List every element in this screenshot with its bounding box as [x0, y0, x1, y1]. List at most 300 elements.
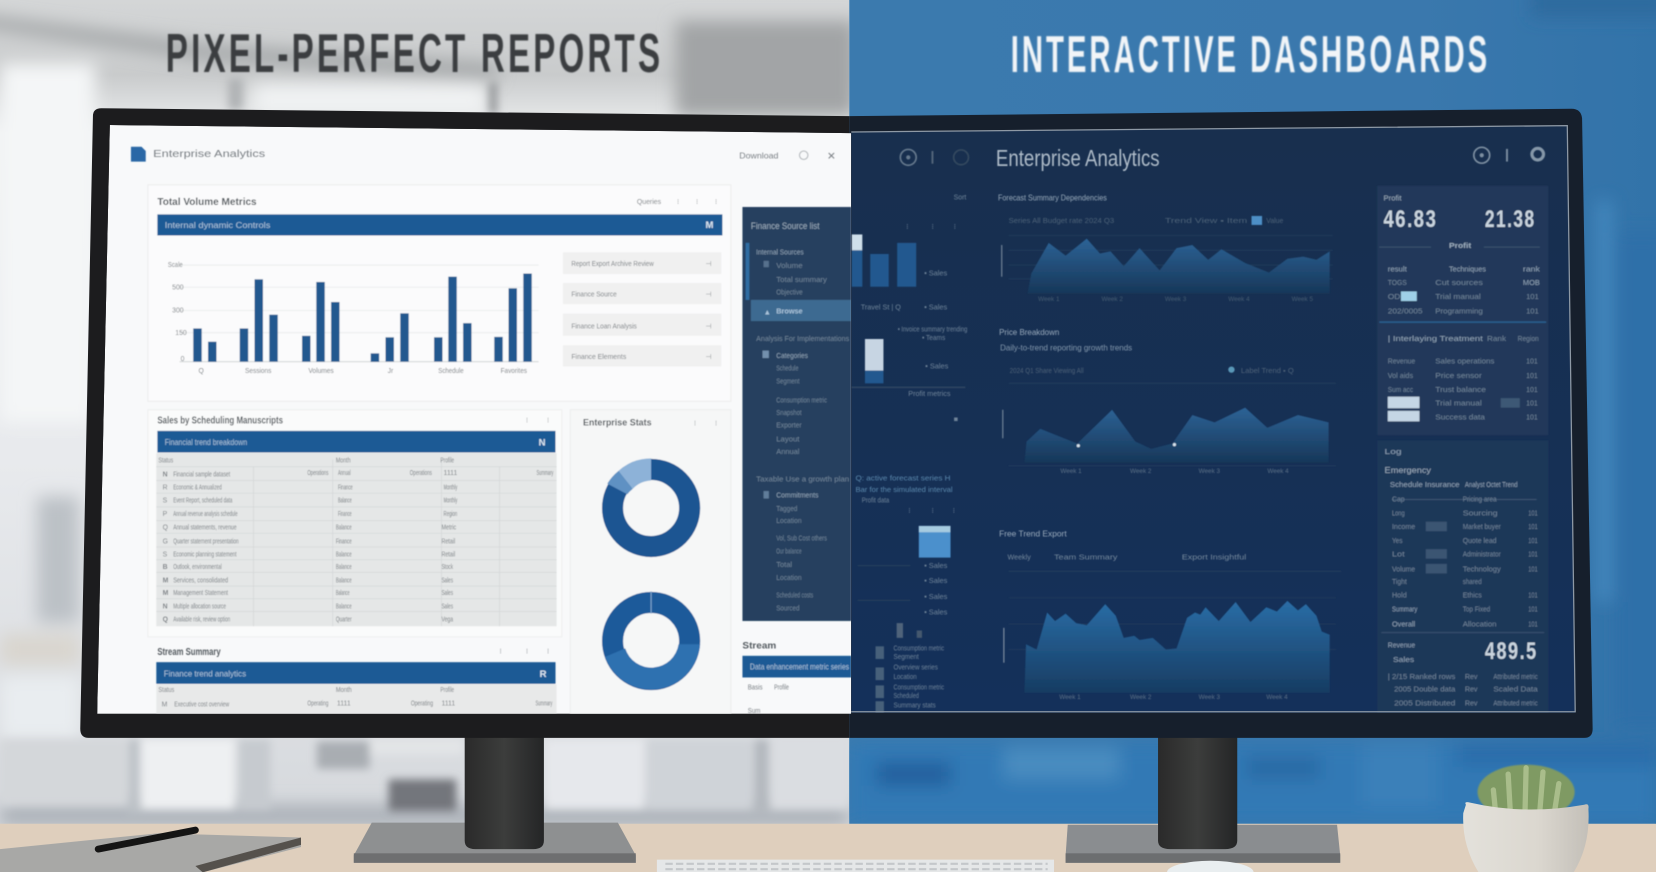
- side list: ⊣: [705, 323, 711, 330]
- panel: emergency table sidebar: Sourcing: [1463, 508, 1498, 517]
- panel: emergency table sidebar: Ethics: [1463, 591, 1482, 600]
- left screen: white report: [97, 125, 851, 715]
- donut chart: upper: [607, 458, 690, 547]
- panel: emergency table sidebar: 101: [1528, 536, 1538, 545]
- monitor bezel: [80, 108, 1593, 738]
- data table: Operations: [410, 470, 432, 477]
- panel: donut chart card: [570, 410, 731, 714]
- panel: profit KPI sidebar: MOB: [1523, 278, 1540, 287]
- monitor stand: right: [1066, 737, 1340, 863]
- panel: navigation sidebar: Location: [776, 516, 802, 525]
- panel: emergency table sidebar: Sales: [1393, 655, 1415, 664]
- data table: 1111: [444, 470, 457, 477]
- panel: navigation sidebar: Taxable Use a growth plan: [756, 475, 849, 484]
- area chart: free trend export: Export Insightful: [1182, 553, 1247, 562]
- panel: profit KPI sidebar: Trust balance: [1435, 385, 1486, 394]
- panel: profit KPI sidebar: | Interlaying Treatment: [1388, 334, 1483, 343]
- panel: total volume metrics card: ⁝: [677, 199, 679, 206]
- desk item: mouse: [1167, 861, 1254, 872]
- data table: Event Report, scheduled data: [173, 498, 232, 505]
- panel: emergency table sidebar: Administrator: [1463, 550, 1501, 559]
- data table: Services, consolidated: [173, 577, 228, 584]
- panel: emergency table sidebar: Emergency: [1385, 465, 1432, 475]
- panel: profit KPI sidebar: Rank: [1487, 334, 1506, 343]
- panel: emergency table sidebar: Overall: [1392, 619, 1416, 628]
- panel: emergency table sidebar: Market buyer: [1463, 522, 1501, 531]
- left mini column: [851, 193, 967, 713]
- data table: Outlook, environmental: [173, 564, 222, 571]
- panel: emergency table sidebar: 2005 Distributed: [1394, 698, 1455, 707]
- panel: navigation sidebar: Schedule: [776, 364, 798, 373]
- panel: emergency table sidebar: Analyst Octet Trend: [1465, 480, 1518, 489]
- panel: emergency table sidebar: Volume: [1392, 564, 1415, 573]
- panel: navigation sidebar: Total summary: [776, 275, 827, 284]
- panel: profit KPI sidebar: Trial manual: [1435, 399, 1482, 408]
- data table: Balance: [336, 552, 352, 559]
- report header: [131, 147, 836, 162]
- data table: Finance: [338, 511, 352, 518]
- data table: Economic & Annualized: [173, 484, 222, 491]
- data table: N: [163, 471, 168, 478]
- panel: emergency table sidebar: shared: [1463, 577, 1482, 586]
- donut chart: lower: [605, 591, 700, 689]
- left mini column: ⁝: [908, 506, 911, 515]
- panel: navigation sidebar: Scheduled costs: [776, 591, 813, 600]
- bar chart: Favorites: [501, 368, 528, 375]
- data table: Sales: [441, 577, 453, 584]
- panel: stream summary table: Operating: [411, 700, 433, 707]
- data table: S: [163, 552, 168, 559]
- panel: total volume metrics card: [148, 185, 731, 401]
- data table: Financial sample dataset: [173, 471, 230, 478]
- area chart: price breakdown: Week 1: [1060, 468, 1082, 475]
- data table: Month: [336, 458, 351, 465]
- side list: [563, 252, 721, 366]
- panel: profit KPI sidebar: 101: [1526, 385, 1538, 394]
- dashboard header: [900, 145, 1544, 171]
- panel: profit KPI sidebar: Techniques: [1449, 264, 1486, 273]
- panel: donut chart card: ⁝: [715, 421, 717, 428]
- panel: emergency table sidebar: Schedule Insurance: [1390, 480, 1460, 489]
- area chart: free trend export: Weekly: [1008, 553, 1031, 562]
- panel: emergency table sidebar: 101: [1528, 564, 1538, 573]
- data table: Annual: [338, 470, 351, 477]
- panel: stream summary table: Profile: [440, 687, 454, 694]
- panel: navigation sidebar: Layout: [776, 434, 799, 443]
- panel: emergency table sidebar: Tight: [1392, 577, 1407, 586]
- data table: Region: [444, 511, 457, 518]
- left mini column: ▪ Sales: [924, 561, 948, 570]
- left mini column: Overview series: [893, 663, 938, 672]
- left mini column: Scheduled: [893, 691, 919, 700]
- data table: Balance: [336, 590, 350, 597]
- panel: emergency table sidebar: Yes: [1392, 536, 1403, 545]
- data table: B: [163, 564, 168, 571]
- area chart: forecast summary: Week 4: [1228, 296, 1250, 303]
- panel: profit KPI sidebar: 101: [1526, 412, 1538, 421]
- panel: profit KPI sidebar: 101: [1526, 371, 1538, 380]
- panel: profit KPI sidebar: Profit: [1449, 241, 1472, 250]
- panel: profit KPI sidebar: Region: [1518, 334, 1539, 343]
- panel: stream mini table: [742, 640, 851, 715]
- panel: stream summary table: Operating: [307, 700, 329, 707]
- panel: navigation sidebar: Sourced: [776, 603, 799, 612]
- area chart: price breakdown: Label Trend ▪ Q: [1241, 368, 1294, 375]
- data table: Profile: [440, 458, 454, 465]
- area chart: free trend export: Team Summary: [1054, 553, 1118, 562]
- data table: Quarter: [336, 616, 352, 623]
- panel: profit KPI sidebar: Sales operations: [1435, 356, 1495, 365]
- area chart: forecast summary: Week 2: [1102, 296, 1123, 303]
- panel: emergency table sidebar: Log: [1385, 447, 1401, 456]
- area chart: free trend export: [999, 528, 1341, 701]
- left heading: Pixel-Perfect Reports: PIXEL-PERFECT REPORTS: [166, 22, 663, 84]
- left mini column: ▪ Sales: [925, 362, 949, 371]
- panel: stream summary table: ⁝: [500, 649, 502, 656]
- panel: navigation sidebar: Commitments: [776, 490, 819, 499]
- left mini column: ▪ Sales: [924, 302, 948, 311]
- data table: G: [163, 538, 168, 545]
- panel: emergency table sidebar: Technology: [1463, 564, 1501, 573]
- panel: profit KPI sidebar: 101: [1526, 399, 1538, 408]
- data table: Balance: [336, 564, 352, 571]
- panel: stream summary table: ⁝: [526, 649, 528, 656]
- data table: P: [163, 511, 168, 518]
- left mini column: ■: [954, 414, 959, 423]
- panel: right blue background: [849, 0, 1656, 834]
- panel: emergency table sidebar: 2005 Double data: [1394, 685, 1456, 694]
- left mini column: Q: active forecast series H: [855, 474, 951, 483]
- data table: Finance: [336, 538, 352, 545]
- bar chart: Volumes: [308, 368, 334, 375]
- data table: Balance: [336, 603, 352, 610]
- panel: stream summary table: Summary: [535, 700, 553, 707]
- panel: total volume metrics card: Internal dynamic Controls: [165, 220, 270, 230]
- left mini column: ▪ Sales: [924, 269, 948, 278]
- panel: profit KPI sidebar: Cut sources: [1435, 278, 1483, 287]
- data table: Operations: [307, 470, 329, 477]
- data table: Metric: [441, 525, 457, 532]
- data table: Finance: [338, 484, 353, 491]
- left mini column: Summary stats: [893, 701, 936, 710]
- panel: profit KPI sidebar: 101: [1526, 292, 1539, 301]
- data table: Management Statement: [173, 590, 228, 597]
- bar chart: 300: [172, 308, 184, 315]
- panel: emergency table sidebar: 101: [1528, 550, 1538, 559]
- panel: emergency table sidebar: [1377, 440, 1548, 714]
- panel: emergency table sidebar: Rev: [1465, 672, 1478, 681]
- data table: Stock: [441, 564, 453, 571]
- left mini column: Sort: [954, 193, 966, 202]
- panel: emergency table sidebar: Income: [1392, 522, 1415, 531]
- panel: navigation sidebar: Location: [776, 573, 802, 582]
- dashboard header: Enterprise Analytics: [996, 145, 1160, 171]
- data table: Annual statements, revenue: [173, 525, 237, 532]
- panel: stream mini table: Profile: [774, 685, 789, 692]
- area chart: price breakdown: Daily-to-trend reporting growth trends: [1000, 343, 1132, 353]
- side list: ⊣: [705, 292, 711, 299]
- panel: emergency table sidebar: Hold: [1392, 591, 1407, 600]
- panel: stream summary table: Status: [158, 687, 175, 694]
- left mini column: ⁝: [931, 506, 934, 515]
- data table: Balance: [336, 577, 352, 584]
- panel: navigation sidebar: Vol, Sub Cost others: [776, 534, 827, 543]
- panel: navigation sidebar: Exporter: [776, 421, 802, 430]
- KPI value: 46.83: 46.83: [1384, 206, 1437, 233]
- side list: Finance Loan Analysis: [571, 323, 637, 330]
- panel: navigation sidebar: Browse: [776, 307, 803, 316]
- KPI value: 21.38: 21.38: [1485, 206, 1536, 233]
- panel: profit KPI sidebar: 101: [1526, 356, 1538, 365]
- bar chart: 150: [175, 330, 187, 337]
- panel: stream summary table: R: [540, 669, 547, 680]
- panel: emergency table sidebar: Top Fixed: [1463, 604, 1490, 613]
- right screen: dark dashboard: [851, 125, 1580, 716]
- bar chart: Sessions: [245, 368, 272, 375]
- panel: emergency table sidebar: 101: [1528, 508, 1538, 517]
- left mini column: Segment: [893, 652, 919, 661]
- area chart: price breakdown: Week 4: [1267, 468, 1289, 475]
- panel: profit KPI sidebar: Profit: [1384, 194, 1401, 203]
- panel: sales table card: ⁝: [547, 417, 549, 424]
- panel: navigation sidebar: Consumption metric: [776, 395, 827, 404]
- left mini column: ▪ Teams: [922, 333, 946, 342]
- panel: navigation sidebar: Tagged: [776, 504, 797, 513]
- data table: Sales: [441, 590, 453, 597]
- area chart: price breakdown: [999, 327, 1336, 475]
- panel: emergency table sidebar: 101: [1528, 604, 1538, 613]
- KPI value: 489.5: 489.5: [1485, 638, 1538, 665]
- panel: profit KPI sidebar: Success data: [1435, 412, 1486, 421]
- left mini column: ▪ Sales: [924, 608, 948, 617]
- panel: profit KPI sidebar: Price sensor: [1435, 371, 1482, 380]
- left mini column: ⁝: [906, 222, 909, 231]
- area chart: forecast summary: Forecast Summary Dependencies: [998, 193, 1107, 203]
- bar chart: 500: [172, 284, 184, 291]
- area chart: free trend export: Week 1: [1059, 694, 1081, 701]
- panel: emergency table sidebar: Rev: [1465, 685, 1478, 694]
- data table: Retail: [441, 552, 456, 559]
- desk item: potted succulent: [1463, 765, 1589, 872]
- left mini column: Profit metrics: [908, 389, 951, 398]
- panel: navigation sidebar: Internal Sources: [756, 248, 804, 257]
- data table: S: [163, 498, 168, 505]
- panel: total volume metrics card: ⁝: [696, 199, 698, 206]
- left mini column: ▪ Sales: [924, 592, 948, 601]
- panel: sales table card: Sales by Scheduling Manuscripts: [157, 415, 283, 426]
- panel: total volume metrics card: M: [705, 220, 713, 231]
- left mini column: ▪ Invoice summary trending: [898, 325, 967, 334]
- panel: profit KPI sidebar: rank: [1523, 264, 1540, 273]
- panel: stream summary table: Month: [336, 687, 352, 694]
- panel: navigation sidebar: Volume: [776, 261, 803, 270]
- panel: donut chart card: ⁝: [694, 421, 696, 428]
- desk item: keyboard: [657, 860, 1054, 872]
- side list: ⊣: [705, 354, 711, 361]
- panel: total volume metrics card: ⁝: [715, 199, 717, 206]
- panel: sales table card: ⁝: [526, 417, 528, 424]
- panel: emergency table sidebar: 101: [1528, 591, 1538, 600]
- panel: emergency table sidebar: Attributed metric: [1493, 698, 1538, 707]
- area chart: price breakdown: 2024 Q1 Share Viewing All: [1010, 368, 1084, 375]
- panel: navigation sidebar: Our balance: [776, 546, 802, 555]
- data table: Q: [163, 616, 169, 623]
- panel: emergency table sidebar: Cap: [1392, 495, 1405, 504]
- report header: ✕: [827, 150, 836, 162]
- data table: Summary: [537, 470, 554, 477]
- panel: emergency table sidebar: Allocation: [1463, 619, 1497, 628]
- panel: navigation sidebar: Categories: [776, 351, 808, 360]
- data table: Balance: [338, 498, 352, 505]
- panel: total volume metrics card: Queries: [637, 199, 662, 206]
- panel: emergency table sidebar: Revenue: [1388, 640, 1415, 649]
- panel: profit KPI sidebar: Programming: [1435, 307, 1483, 316]
- side list: Finance Source: [571, 292, 617, 299]
- panel: emergency table sidebar: Long: [1392, 508, 1405, 517]
- data table: Multiple allocation source: [173, 603, 226, 610]
- area chart: free trend export: Week 4: [1266, 694, 1288, 701]
- area chart: forecast summary: Series All Budget rate 2024 Q3: [1009, 218, 1114, 225]
- panel: stream summary table: Finance trend analytics: [164, 668, 246, 678]
- panel: profit KPI sidebar: OD: [1388, 292, 1400, 301]
- panel: stream summary table: ⁝: [547, 649, 549, 656]
- panel: navigation sidebar: Annual: [776, 447, 800, 456]
- panel: emergency table sidebar: Attributed metric: [1493, 672, 1538, 681]
- panel: donut chart card: Enterprise Stats: [583, 418, 652, 428]
- panel: left office background: [0, 0, 855, 834]
- panel: navigation sidebar: Objective: [776, 288, 803, 297]
- left mini column: ▪ Sales: [924, 576, 948, 585]
- panel: emergency table sidebar: Summary: [1392, 604, 1418, 613]
- report header: Enterprise Analytics: [153, 148, 265, 160]
- panel: stream summary table: 1111: [441, 700, 455, 707]
- left mini column: Location: [893, 672, 917, 681]
- data table: Monthly: [444, 498, 458, 505]
- data table: Retail: [441, 538, 456, 545]
- desk item: notebook and pen: [0, 830, 301, 872]
- left mini column: Bar for the simulated interval: [855, 485, 953, 494]
- panel: navigation sidebar: Finance Source list: [751, 221, 820, 231]
- data table: N: [163, 603, 168, 610]
- area chart: free trend export: Free Trend Export: [999, 528, 1067, 538]
- panel: profit KPI sidebar: Vol aids: [1388, 371, 1413, 380]
- panel: emergency table sidebar: 101: [1528, 522, 1538, 531]
- data table: Available risk, review option: [173, 616, 230, 623]
- panel: navigation sidebar: ▲: [764, 308, 771, 317]
- panel: stream mini table: Basis: [748, 685, 763, 692]
- panel: profit KPI sidebar: result: [1388, 264, 1407, 273]
- bar chart: Schedule: [438, 368, 464, 375]
- left mini column: Consumption metric: [893, 683, 944, 692]
- panel: emergency table sidebar: Scaled Data: [1493, 685, 1539, 694]
- side list: Report Export Archive Review: [571, 261, 654, 268]
- data table: Sales: [441, 603, 453, 610]
- panel: stream summary table: Executive cost overview: [174, 702, 229, 709]
- data table: Annual revenue analysis schedule: [173, 511, 238, 518]
- panel: profit KPI sidebar: 202/0005: [1388, 307, 1423, 316]
- panel: stream mini table: Sum: [748, 708, 761, 715]
- data table: M: [163, 577, 169, 584]
- panel: stream summary table: [156, 647, 557, 714]
- panel: profit KPI sidebar: Revenue: [1388, 356, 1415, 365]
- panel: profit KPI sidebar: 101: [1526, 307, 1539, 316]
- bar chart: [168, 262, 539, 375]
- panel: sales table card: Financial trend breakdown: [165, 437, 247, 447]
- panel: emergency table sidebar: Quote lead: [1463, 536, 1497, 545]
- panel: profit KPI sidebar: Trial manual: [1435, 292, 1481, 301]
- data table: Economic planning statement: [173, 552, 237, 559]
- data table: Q: [163, 525, 168, 532]
- report header: Download: [739, 150, 779, 160]
- area chart: forecast summary: Week 3: [1165, 296, 1187, 303]
- area chart: forecast summary: Week 5: [1292, 296, 1313, 303]
- left mini column: ⁝: [953, 506, 955, 515]
- area chart: forecast summary: Trend View ▪ Item: [1165, 218, 1248, 225]
- data table: M: [163, 590, 169, 597]
- area chart: forecast summary: Value: [1266, 218, 1284, 225]
- area chart: price breakdown: Price Breakdown: [999, 327, 1060, 337]
- screen frame line: [851, 126, 1575, 712]
- panel: navigation sidebar: Segment: [776, 376, 799, 385]
- area chart: price breakdown: Week 2: [1130, 468, 1152, 475]
- data table: Quarter statement presentation: [173, 538, 239, 545]
- panel: emergency table sidebar: | 2/15 Ranked rows: [1388, 672, 1456, 681]
- panel: profit KPI sidebar: [1377, 186, 1548, 435]
- bar chart: Q: [199, 368, 204, 375]
- data table: Balance: [336, 525, 352, 532]
- panel: navigation sidebar: Snapshot: [776, 408, 802, 417]
- data table: Status: [158, 458, 174, 465]
- bar chart: Scale: [168, 262, 183, 269]
- data table: Monthly: [444, 484, 458, 491]
- panel: sales table card: N: [539, 438, 546, 449]
- bar chart: Jr: [388, 368, 394, 375]
- panel: desk surface: [0, 824, 1656, 872]
- panel: stream summary table: 1111: [337, 700, 351, 707]
- left mini column: ⁝: [954, 222, 956, 231]
- panel: emergency table sidebar: Rev: [1465, 698, 1478, 707]
- bar chart: 0: [181, 356, 185, 363]
- panel: sales table card: [148, 410, 562, 637]
- panel: stream summary table: Stream Summary: [157, 647, 221, 658]
- side list: Finance Elements: [571, 354, 627, 361]
- panel: emergency table sidebar: Lot: [1392, 550, 1405, 559]
- area chart: free trend export: Week 2: [1130, 694, 1152, 701]
- panel: emergency table sidebar: Pricing area: [1463, 495, 1497, 504]
- left mini column: Profit data: [862, 496, 890, 505]
- data table: R: [163, 484, 168, 491]
- panel: navigation sidebar: Total: [776, 560, 792, 569]
- panel: navigation sidebar: Analysis For Implementations: [756, 334, 849, 343]
- left mini column: Consumption metric: [893, 644, 944, 653]
- data table: [156, 453, 557, 626]
- monitor stand: left: [354, 737, 636, 863]
- panel: stream mini table: Data enhancement metric series: [750, 662, 849, 672]
- area chart: forecast summary: Week 1: [1038, 296, 1060, 303]
- left mini column: Travel St | Q: [861, 302, 901, 311]
- panel: stream summary table: M: [162, 702, 168, 709]
- side list: ⊣: [705, 261, 711, 268]
- area chart: forecast summary: [998, 193, 1333, 303]
- panel: profit KPI sidebar: Sum acc: [1388, 385, 1413, 394]
- data table: Vega: [441, 616, 453, 623]
- area chart: free trend export: Week 3: [1199, 694, 1221, 701]
- panel: total volume metrics card: Total Volume Metrics: [157, 197, 257, 208]
- left mini column: ⁝: [931, 222, 934, 231]
- panel: emergency table sidebar: 101: [1528, 619, 1538, 628]
- panel: profit KPI sidebar: TOGS: [1388, 278, 1407, 287]
- area chart: price breakdown: Week 3: [1199, 468, 1221, 475]
